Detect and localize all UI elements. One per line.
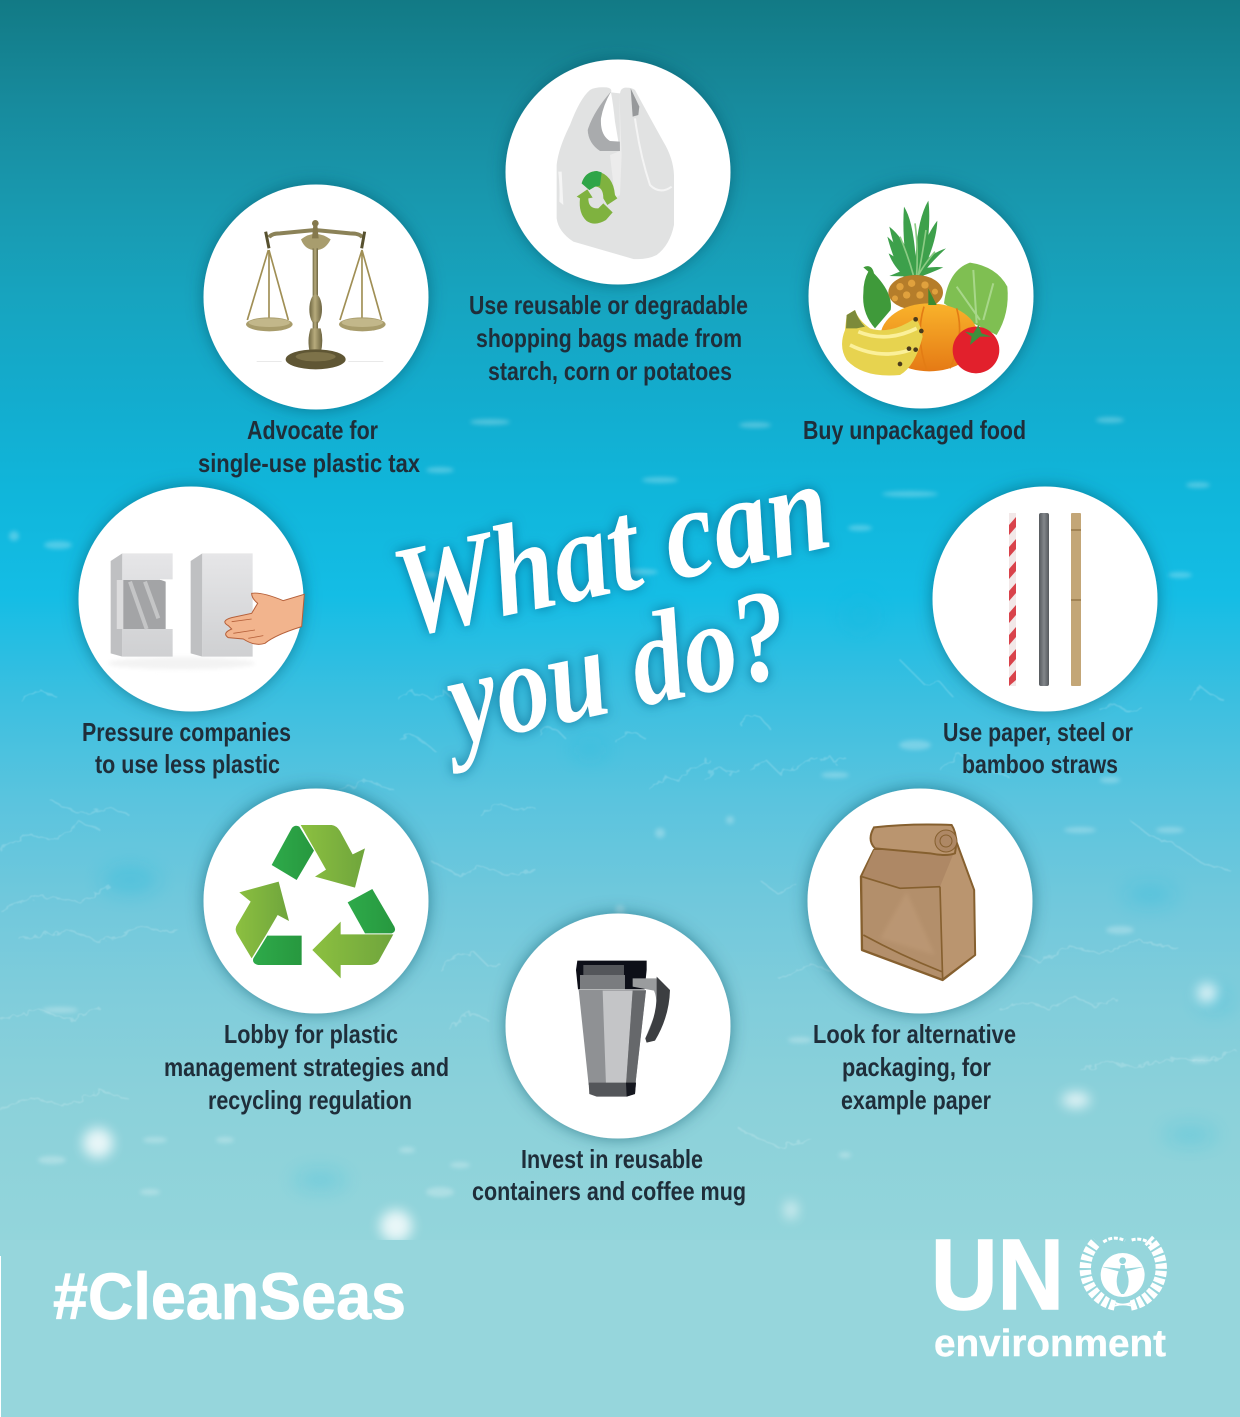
title: What can you do?: you do? [423,561,801,776]
panel: lobby for regulation [164,788,449,1115]
label: Pressure companies [82,717,291,747]
label [943,717,1133,779]
icon: balance scales [246,220,386,369]
panel: plastic tax [198,184,428,478]
panel: reusable bags [469,60,748,386]
label: packaging, for [842,1052,991,1082]
panel: unpackaged food [803,184,1034,445]
hashtag: #CleanSeas [53,1259,406,1333]
icon: recycling arrows [236,825,395,978]
label: Invest in reusable [521,1144,703,1174]
panel: paper packaging [808,788,1032,1115]
title: What can you do?: What can [381,433,841,665]
panel: reusable mug [472,914,746,1206]
icon: shopping bag with recycle symbol [557,87,674,259]
label [472,1144,746,1206]
label: management strategies and [164,1052,449,1082]
logo: UN environment: environment [934,1323,1166,1365]
label: to use less plastic [95,749,280,779]
label [82,717,291,779]
label: shopping bags made from [476,323,742,353]
label: bamboo straws [962,749,1118,779]
icon: UN environment emblem [1085,1238,1161,1307]
label: Buy unpackaged food [803,415,1026,445]
logo: UN environment [931,1219,1166,1365]
panel: pressure companies [78,486,304,779]
label: Use reusable or degradable [469,290,748,320]
label [198,415,420,478]
icon: paper straw [1009,513,1016,686]
icon: steel straw [1039,513,1049,686]
label: Advocate for [247,415,378,445]
label: Look for alternative [813,1019,1016,1049]
label: Lobby for plastic [224,1019,398,1049]
label: example paper [841,1085,991,1115]
label: recycling regulation [208,1085,412,1115]
label [164,1019,449,1115]
panel: straws [932,486,1158,779]
label: Use paper, steel or [943,717,1133,747]
label [813,1019,1016,1115]
label: containers and coffee mug [472,1176,746,1206]
icon: boxes and hand [108,553,304,669]
title: What can you do? [381,433,841,776]
logo: UN environment: UN [931,1219,1064,1331]
label: single-use plastic tax [198,448,420,478]
icon: brown paper bag [861,825,975,980]
icon: bamboo straw [1071,513,1081,686]
icon: travel mug [576,961,670,1097]
icon: fruit and vegetables [842,201,1008,375]
label [469,290,748,386]
label: starch, corn or potatoes [488,356,732,386]
